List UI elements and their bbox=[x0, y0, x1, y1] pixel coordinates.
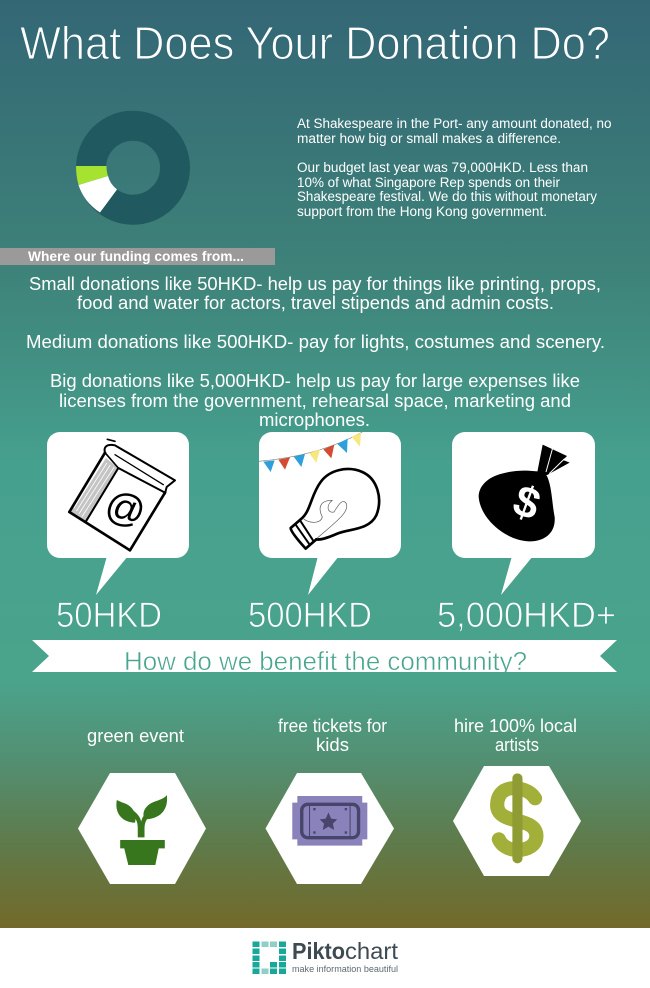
icon: potted plant bbox=[116, 795, 167, 865]
hexagon bbox=[266, 773, 394, 884]
donation descriptions text block: Medium donations like 500HKD- pay for lights, costumes and scenery. bbox=[26, 331, 605, 352]
donation descriptions text block: licenses from the government, rehearsal space, marketing and bbox=[59, 390, 571, 411]
icon: dollar sign bbox=[497, 778, 536, 858]
donation descriptions text block: Small donations like 50HKD- help us pay for things like printing, props, bbox=[29, 273, 601, 294]
hexagon bbox=[78, 773, 206, 884]
icon: ticket bbox=[292, 796, 367, 846]
intro text block: matter how big or small makes a difference. bbox=[297, 131, 561, 147]
icon: money bag: $ bbox=[507, 476, 547, 530]
speech bubble: 500HKD bbox=[259, 432, 401, 595]
ribbon banner heading bbox=[32, 640, 617, 672]
intro text block: Shakespeare festival. We do this without monetary bbox=[297, 189, 598, 205]
icon: sketched address book: @ bbox=[101, 483, 149, 534]
donation descriptions text block: microphones. bbox=[259, 409, 370, 430]
donation descriptions text block: Big donations like 5,000HKD- help us pay for large expenses like bbox=[50, 370, 580, 391]
logo mark bbox=[252, 942, 286, 974]
icon: bunting flags bbox=[259, 432, 362, 472]
title: What Does Your Donation Do? bbox=[20, 17, 610, 69]
label: free tickets for kids: free tickets for bbox=[278, 715, 387, 736]
label: free tickets for kids bbox=[278, 715, 387, 755]
label: hire 100% local artists bbox=[454, 715, 577, 755]
donation descriptions text block bbox=[26, 273, 605, 430]
icon: sketched address book bbox=[69, 439, 175, 550]
amount label: 500HKD: 500HKD bbox=[248, 596, 372, 635]
donation descriptions text block: food and water for actors, travel stipends and admin costs. bbox=[77, 292, 554, 313]
speech bubble: 50HKD bbox=[47, 432, 189, 595]
label: hire 100% local artists: artists bbox=[495, 734, 539, 755]
speech bubble: 5,000HKD+ bbox=[452, 432, 595, 595]
benefit: hire 100% local artists bbox=[453, 715, 581, 876]
label: hire 100% local artists: hire 100% local bbox=[454, 715, 577, 736]
amount label: 50HKD: 50HKD bbox=[56, 596, 162, 635]
intro text block bbox=[297, 116, 612, 220]
icon: light bulb bbox=[291, 469, 379, 549]
label: green event: green event bbox=[87, 725, 185, 746]
intro text block: At Shakespeare in the Port- any amount donated, no bbox=[297, 116, 612, 132]
amount label: 5,000HKD+: 5,000HKD+ bbox=[437, 596, 616, 635]
intro text block: 10% of what Singapore Rep spends on their bbox=[297, 175, 560, 191]
intro text block: Our budget last year was 79,000HKD. Less than bbox=[297, 160, 588, 176]
Piktochart logo bbox=[252, 938, 399, 974]
label: free tickets for kids: kids bbox=[316, 734, 349, 755]
intro text block: support from the Hong Kong government. bbox=[297, 204, 547, 220]
benefit: green event bbox=[78, 725, 206, 884]
grey heading bar: where our funding comes from: Where our funding comes from... bbox=[28, 248, 244, 264]
benefit: free tickets for kids bbox=[266, 715, 394, 884]
hexagon bbox=[453, 766, 581, 876]
ribbon banner heading: How do we benefit the community? bbox=[124, 646, 527, 676]
footer panel bbox=[0, 928, 650, 988]
Piktochart logo: chart bbox=[345, 938, 399, 964]
logo wordmark: Pikto bbox=[292, 938, 345, 964]
donut chart: funding sources bbox=[76, 126, 175, 212]
icon: money bag bbox=[479, 445, 570, 541]
logo tagline: make information beautiful bbox=[292, 964, 398, 974]
